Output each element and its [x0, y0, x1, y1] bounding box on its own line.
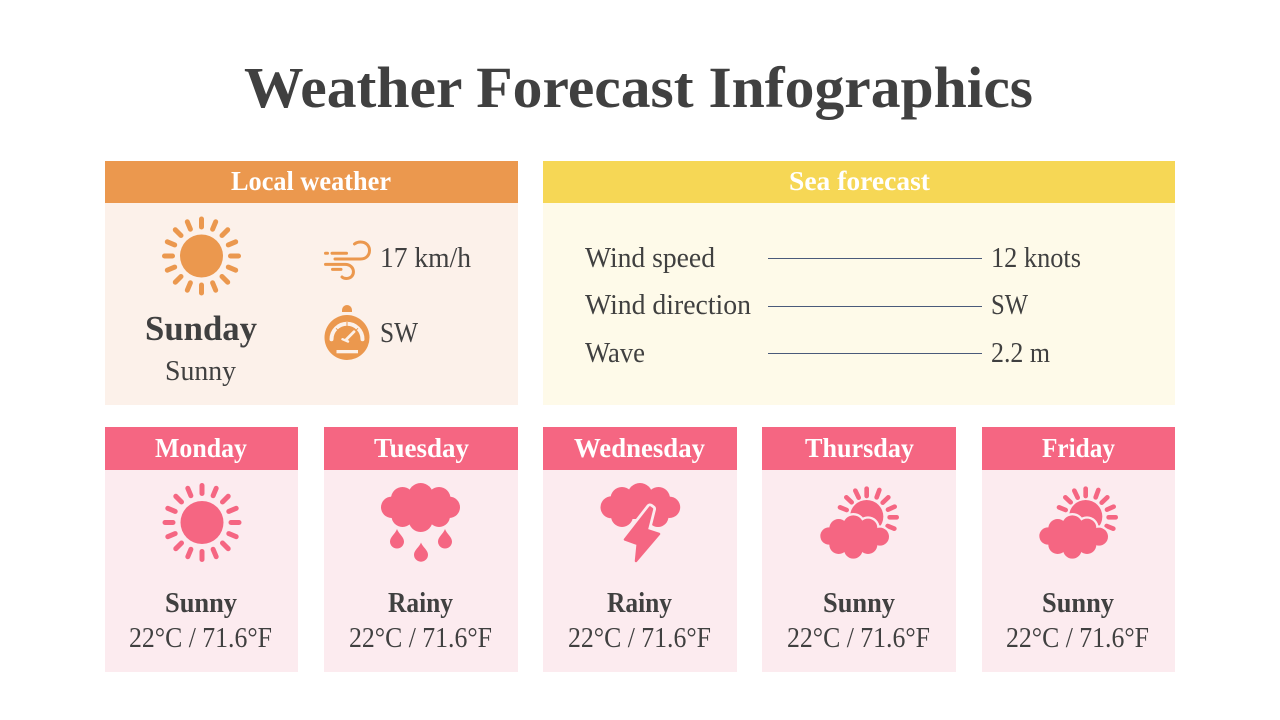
panel: friday: [982, 427, 1175, 672]
row: wind direction: SW: [991, 290, 1029, 321]
icon: sun behind cloud: [820, 489, 897, 559]
condition: Rainy: [388, 588, 453, 619]
thursday header: Thursday: [805, 433, 914, 463]
icon: rain cloud: [381, 483, 460, 562]
condition: Rainy: [607, 588, 672, 619]
tuesday header: Tuesday: [374, 433, 469, 463]
row: wave: 2.2 m: [991, 338, 1050, 369]
condition: Sunny: [823, 588, 895, 619]
condition: Sunny: [165, 588, 237, 619]
panel: thursday: [762, 427, 956, 672]
condition: Sunny: [1042, 588, 1114, 619]
row: wind speed: Wind speed: [585, 243, 715, 274]
friday header: Friday: [1042, 433, 1115, 463]
icon: sun: [165, 486, 239, 560]
icon: thunderstorm: [600, 483, 680, 561]
icon: sun behind cloud: [1039, 489, 1116, 559]
panel: tuesday: [324, 427, 518, 672]
title: Weather Forecast Infographics: [244, 55, 1033, 120]
icon: gauge: [324, 305, 370, 360]
row: wind speed: 12 knots: [991, 243, 1081, 274]
thursday header: [762, 427, 956, 470]
icon: wind: [326, 242, 370, 278]
temperature: 22°C / 71.6°F: [1006, 623, 1149, 654]
monday header: Monday: [155, 433, 247, 463]
wind speed value: 17 km/h: [380, 243, 471, 274]
icon: sun: [164, 219, 238, 293]
wind direction value: SW: [380, 318, 419, 349]
panel: local weather: [105, 161, 518, 405]
local weather header: Local weather: [231, 166, 391, 196]
panel: wednesday: [543, 427, 737, 672]
monday header: [105, 427, 298, 470]
day name: Sunday: [145, 309, 257, 348]
condition: Sunny: [165, 356, 236, 387]
row: wind speed: [585, 243, 1081, 274]
local weather header: [105, 161, 518, 203]
temperature: 22°C / 71.6°F: [787, 623, 930, 654]
row: wind direction: Wind direction: [585, 290, 751, 321]
wednesday header: Wednesday: [574, 433, 705, 463]
temperature: 22°C / 71.6°F: [349, 623, 492, 654]
panel: sea forecast: [543, 161, 1175, 405]
sea forecast header: Sea forecast: [789, 166, 930, 196]
friday header: [982, 427, 1175, 470]
wednesday header: [543, 427, 737, 470]
temperature: 22°C / 71.6°F: [129, 623, 272, 654]
tuesday header: [324, 427, 518, 470]
row: wave: [585, 338, 1050, 369]
sea forecast header: [543, 161, 1175, 203]
row: wind direction: [585, 290, 1029, 321]
row: wave: Wave: [585, 338, 645, 369]
temperature: 22°C / 71.6°F: [568, 623, 711, 654]
panel: monday: [105, 427, 298, 672]
